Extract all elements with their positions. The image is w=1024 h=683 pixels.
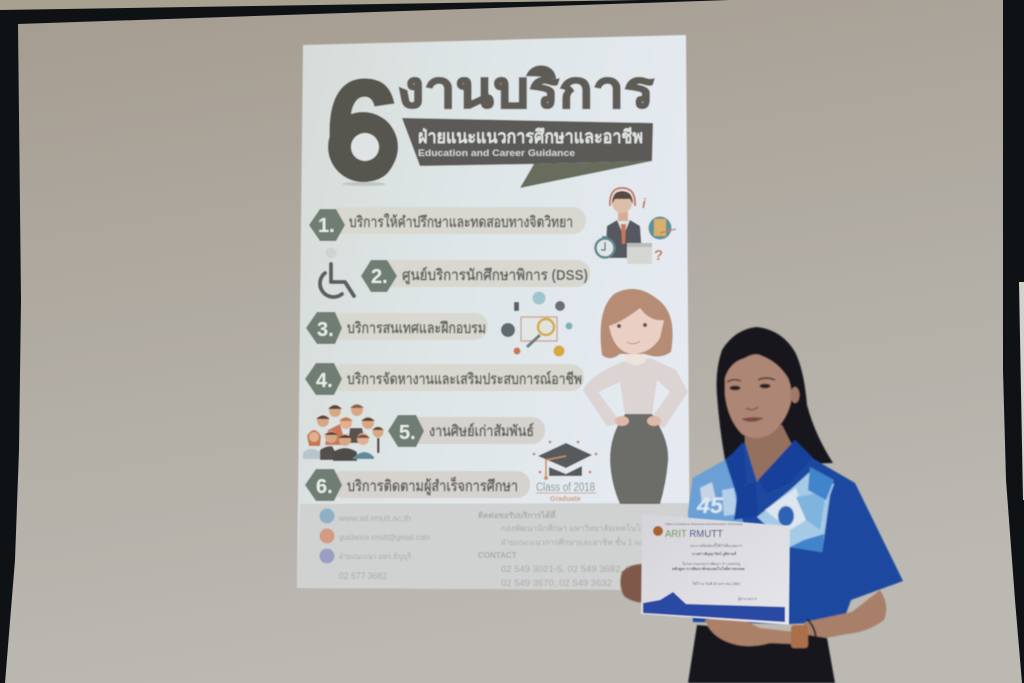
watch — [791, 625, 808, 648]
logo — [653, 526, 663, 536]
certificate logo text: ARIT RMUTT — [665, 528, 724, 540]
item 3: บริการสนเทศและฝึกอบรม — [347, 319, 486, 337]
placket — [734, 482, 758, 520]
icon: woman illustration — [583, 289, 688, 504]
contact text right: 02 549 3021-5, 02 549 3682, 02 — [501, 564, 636, 575]
shirt yoke pattern right — [757, 470, 834, 552]
contact text left: guidance.rmutt@gmail.com — [339, 533, 430, 542]
banner: education and career guidance: Education and Career Guidance — [418, 148, 575, 159]
eyes and brows — [730, 386, 740, 390]
certificate body text: ผู้อำนวยการ — [738, 596, 757, 601]
certificate body text: หลักสูตร การพัฒนาทักษะเทคโนโลยีสารสนเทศ — [672, 566, 745, 572]
contact text right: 02 549 3670, 02 549 3632 — [501, 578, 612, 589]
hand on certificate — [705, 616, 795, 646]
banner: education and career guidance — [402, 118, 653, 188]
icon: graduation cap, class of 2018 — [533, 441, 597, 503]
contact text right: กองพัฒนานักศึกษา มหาวิทยาลัยเทคโนโลยีราชมงคล — [501, 523, 684, 533]
forearm — [800, 590, 886, 640]
contact text right — [478, 509, 684, 589]
panel: projected poster — [297, 35, 690, 590]
item 6 — [305, 469, 530, 501]
left hand — [620, 564, 648, 602]
item 3: 3. — [317, 319, 334, 341]
item 4: 4. — [316, 370, 333, 392]
face — [725, 354, 792, 438]
contact text left: www.sd.rmutt.ac.th — [338, 514, 411, 523]
collar left — [727, 442, 747, 491]
arms and blouse — [583, 358, 688, 428]
item 5 — [388, 415, 545, 447]
trousers — [688, 625, 835, 683]
certificate body text: โครงการอบรมการพัฒนา IT Learning — [682, 561, 740, 566]
item 1: บริการให้คำปรึกษาและทดสอบทางจิตวิทยา — [349, 213, 573, 231]
icon: consultant with headset — [596, 188, 676, 264]
icon: wheelchair — [320, 248, 354, 297]
icon: consultant with headset: i — [642, 195, 647, 211]
item 3 — [306, 312, 488, 344]
shirt number 45: 45 — [696, 493, 724, 518]
certificate body text: ให้ไว้ ณ วันที่ 29 มกราคม 2561 — [692, 581, 740, 586]
hair — [717, 327, 833, 465]
icon: facebook — [320, 548, 334, 564]
big number 6: 6 — [326, 51, 400, 210]
item 5: งานศิษย์เก่าสัมพันธ์ — [429, 422, 534, 440]
neck — [625, 352, 646, 366]
footer band — [297, 503, 690, 590]
icon: email — [320, 528, 334, 544]
certificate — [641, 514, 790, 625]
certificate body text: ประกาศนียบัตรนี้ให้ไว้เพื่อแสดงว่า — [690, 543, 743, 548]
banner: education and career guidance: ฝ่ายแนะแนวการศึกษาและอาชีพ — [418, 126, 643, 147]
icon: web — [320, 508, 334, 524]
icon: consultant with headset: ? — [654, 247, 663, 264]
certificate body text — [665, 522, 757, 601]
title: งานบริการ — [397, 62, 654, 118]
item 5: 5. — [399, 422, 416, 444]
collar right — [758, 440, 812, 493]
face — [609, 308, 664, 354]
contact text right: ฝ่ายแนะแนวการศึกษาและอาชีพ ชั้น 1 และ ชั้น 2 — [501, 536, 669, 547]
icon: magnifier and documents — [501, 292, 572, 356]
item 4 — [305, 363, 584, 395]
hands — [615, 416, 629, 426]
item 1: 1. — [318, 215, 335, 237]
item 6: บริการติดตามผู้สำเร็จการศึกษา — [347, 476, 518, 496]
bracelet — [807, 619, 816, 640]
hair back — [600, 289, 673, 358]
nose and mouth — [746, 407, 758, 410]
item 2: ศูนย์บริการนักศึกษาพิการ (DSS) — [402, 266, 588, 285]
item 2: 2. — [371, 266, 388, 288]
item 4: บริการจัดหางานและเสริมประสบการณ์อาชีพ — [347, 370, 582, 388]
icon: graduation cap, class of 2018: Graduate — [550, 496, 581, 503]
blue wave — [643, 592, 785, 622]
presenter — [620, 327, 903, 683]
contact text left: 02 577 3682 — [339, 571, 387, 581]
icon: group of alumni — [303, 404, 384, 461]
contact text right: ติดต่อขอรับบริการได้ที่ — [478, 509, 556, 520]
icon: graduation cap, class of 2018: Class of 2018 — [536, 482, 595, 494]
certificate body text: Office of Academic Resources and Information Technology — [665, 522, 743, 526]
item 1 — [309, 207, 586, 241]
shirt body — [688, 442, 903, 624]
item 2 — [361, 260, 590, 292]
contact text left — [338, 514, 430, 581]
item 6: 6. — [316, 476, 333, 498]
contact text left: ฝ่ายแนะแนว มทร.ธัญบุรี — [339, 552, 412, 561]
skirt — [610, 414, 668, 504]
ear — [790, 387, 800, 403]
shirt emblem — [778, 506, 794, 526]
neck — [745, 425, 792, 482]
shirt yoke pattern left — [688, 460, 745, 530]
contact text right: CONTACT — [478, 551, 517, 560]
certificate body text: นางสาวธัญญารัตน์ ภูศิลาแท้ — [692, 551, 737, 557]
